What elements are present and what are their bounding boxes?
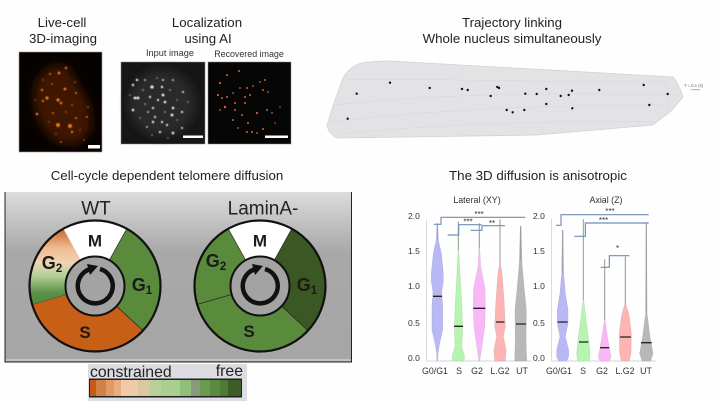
wheel: LaminA-: G <box>297 275 311 295</box>
y axis labels: lateral: 2.0 <box>408 211 420 221</box>
heading: live-cell 3D imaging <box>29 15 97 46</box>
y axis labels: lateral: 0.0 <box>408 353 420 363</box>
chart: axial (Z) violin plot <box>533 195 656 376</box>
wheel: WT: G <box>132 275 146 295</box>
heading: live-cell 3D imaging: Live-cell <box>38 15 86 30</box>
x axis labels: lateral <box>422 366 528 376</box>
violins: lateral <box>427 217 532 361</box>
x axis labels: axial <box>546 366 652 376</box>
panel: cell-cycle wheels <box>5 192 352 362</box>
wheel: WT: M <box>88 232 102 250</box>
legend: constrained to free colour scale: free <box>216 363 243 380</box>
label: WT: WT <box>81 198 111 220</box>
y axis labels: axial: 1.5 <box>533 246 545 256</box>
label: recovered image: Recovered image <box>214 49 284 59</box>
significance stars: axial <box>599 207 619 253</box>
y axis labels: lateral <box>408 211 420 363</box>
wheel: WT <box>29 220 161 352</box>
x axis labels: axial: L.G2 <box>615 366 635 376</box>
3D nucleus with tracked telomeres <box>327 61 683 138</box>
wheel: WT: 2 <box>56 263 62 275</box>
x axis labels: lateral: L.G2 <box>490 366 510 376</box>
y axis labels: axial <box>533 211 545 363</box>
significance stars: lateral: *** <box>474 210 484 219</box>
heading: localization using AI: using AI <box>184 31 232 46</box>
heading: localization using AI: Localization <box>172 15 242 30</box>
significance stars: axial: *** <box>599 216 608 225</box>
significance stars: lateral: *** <box>463 218 473 226</box>
significance stars: axial: * <box>616 244 619 253</box>
significance stars: lateral <box>463 210 495 228</box>
wheel: LaminA-: M <box>253 232 267 250</box>
time stamp: T = 0.1 (s) <box>684 83 704 88</box>
chart title: axial: Axial (Z) <box>589 195 623 205</box>
significance stars: lateral: ** <box>489 219 495 228</box>
heading: cell-cycle dependent telomere diffusion: Cell-cycle dependent telomere diffusion <box>51 168 283 183</box>
wheel: LaminA- <box>194 220 326 352</box>
x axis labels: lateral: UT <box>516 366 528 376</box>
heading: trajectory linking <box>423 15 602 46</box>
x axis labels: lateral: G2 <box>471 366 483 376</box>
chart: lateral (XY) violin plot <box>408 195 532 376</box>
wheel: LaminA-: G <box>206 251 220 271</box>
wheel: WT: G <box>42 253 56 273</box>
x axis labels: axial: G2 <box>596 366 608 376</box>
micrograph: input image <box>121 62 205 144</box>
heading: localization using AI <box>172 15 242 46</box>
heading: trajectory linking: Trajectory linking <box>462 15 562 30</box>
y axis labels: axial: 0.0 <box>533 353 545 363</box>
y axis labels: axial: 0.5 <box>533 318 545 328</box>
significance stars: axial: *** <box>605 207 615 216</box>
telomere dots <box>346 82 669 120</box>
wheel: LaminA-: 2 <box>220 261 226 273</box>
x axis labels: axial: G0/G1 <box>546 366 572 376</box>
label: input image: Input image <box>146 48 194 58</box>
y axis labels: axial: 1.0 <box>533 281 545 291</box>
time stamp <box>684 83 704 90</box>
legend: constrained to free colour scale <box>88 363 247 401</box>
label: LaminA-: LaminA- <box>228 198 298 220</box>
wheel: LaminA-: S <box>243 322 255 341</box>
wheel: LaminA-: 1 <box>311 285 318 297</box>
x axis labels: lateral: G0/G1 <box>422 366 448 376</box>
micrograph: live cell nucleus <box>19 52 102 152</box>
wheel: WT: 1 <box>146 285 153 297</box>
y axis labels: lateral: 1.5 <box>408 246 420 256</box>
heading: the 3D diffusion is anisotropic: The 3D diffusion is anisotropic <box>449 168 627 183</box>
heading: trajectory linking: Whole nucleus simultaneously <box>423 31 602 46</box>
x axis labels: lateral: S <box>456 366 462 376</box>
x axis labels: axial: S <box>580 366 586 376</box>
x axis labels: axial: UT <box>640 366 652 376</box>
heading: live-cell 3D imaging: 3D-imaging <box>29 31 97 46</box>
micrograph: recovered image <box>208 62 291 144</box>
y axis labels: lateral: 1.0 <box>408 281 420 291</box>
legend: constrained to free colour scale: constrained <box>90 364 172 381</box>
wheel: WT: S <box>79 323 91 342</box>
y axis labels: axial: 2.0 <box>533 211 545 221</box>
y axis labels: lateral: 0.5 <box>408 318 420 328</box>
violins: axial <box>552 215 656 361</box>
chart title: lateral: Lateral (XY) <box>453 195 501 205</box>
